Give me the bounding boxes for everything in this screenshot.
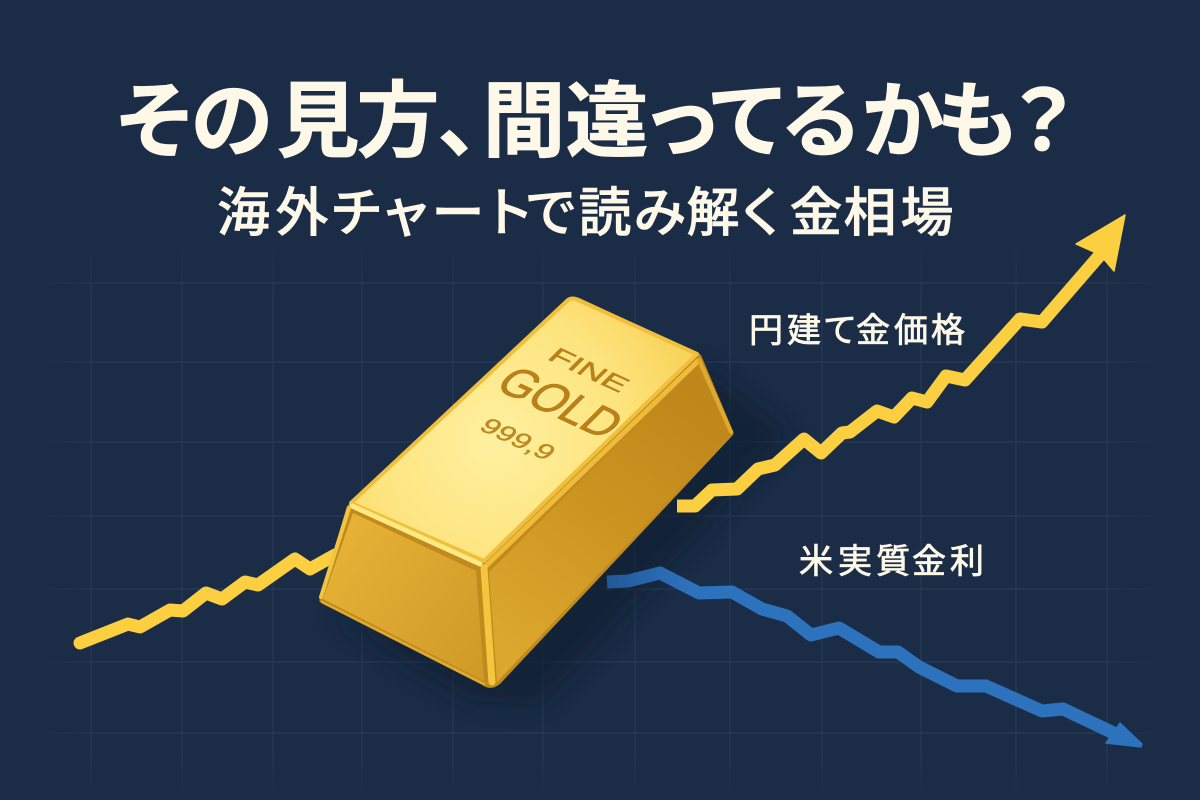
gold bar right face [489, 366, 731, 682]
title: その見方、間違ってるかも？ [114, 75, 1084, 168]
stamp: GOLD: GOLD [486, 358, 635, 447]
infographic canvas [74, 78, 1143, 770]
gold bar front face [323, 513, 484, 681]
yellow line: yen gold price, left section [80, 555, 335, 643]
stamp: GOLD: GOLD [486, 359, 636, 448]
chart grid [75, 272, 1125, 770]
stamp: FINE: FINE [542, 344, 636, 398]
subtitle: 海外チャートで読み解く金相場 [217, 184, 954, 243]
bar shadow [362, 375, 786, 704]
label: US real interest rate: 米実質金利 [799, 543, 984, 581]
blue arrow: US real interest rate [607, 573, 1142, 747]
yellow arrow: yen gold price, right section [677, 215, 1125, 506]
stamp: 999,9: 999,9 [474, 413, 562, 465]
label: yen gold price: 円建て金価格 [749, 312, 965, 350]
gold bar silhouette [323, 300, 730, 684]
stamp: FINE: FINE [542, 343, 636, 397]
gold bar top face [351, 298, 697, 561]
gold bar [321, 298, 731, 684]
stamp: FINE [542, 343, 637, 398]
stamp: 999,9: 999,9 [474, 414, 562, 466]
gold bar bevels [321, 360, 731, 684]
